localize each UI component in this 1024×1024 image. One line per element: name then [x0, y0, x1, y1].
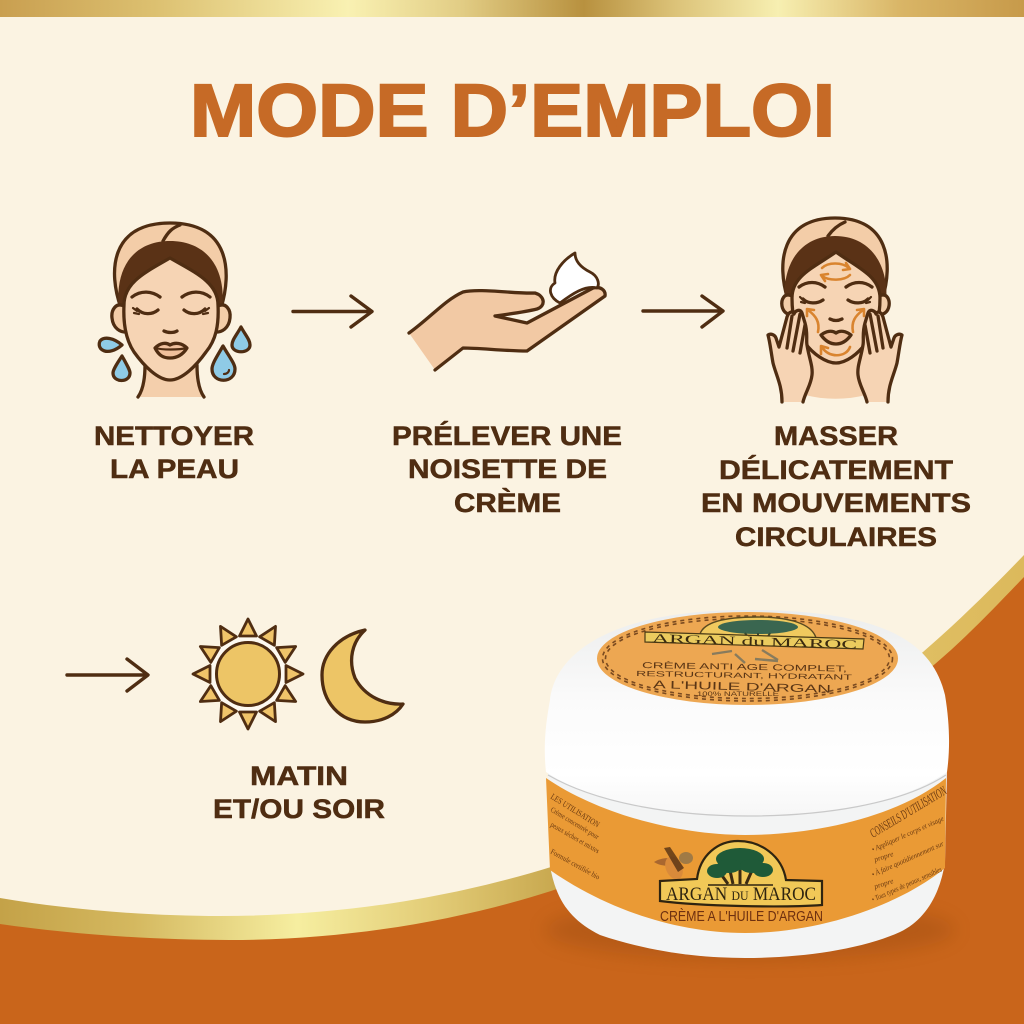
label: take cream: NOISETTE DE	[408, 454, 607, 484]
jar base	[548, 770, 947, 958]
icon: face with water drops	[99, 223, 250, 397]
argan tree	[707, 848, 773, 885]
side text right: • Tous types de peaux, sensibles	[870, 865, 943, 904]
gold curved band	[0, 555, 1024, 940]
side text right: • Appliquer le corps et visage	[870, 814, 946, 854]
lid text	[636, 660, 853, 698]
label: massage: DÉLICATEMENT	[719, 454, 954, 485]
lid text: A L'HUILE D'ARGAN	[653, 679, 831, 696]
side text left: peaux sèches et mixtes	[549, 820, 601, 855]
jar lid	[545, 610, 949, 816]
icon: sun	[193, 619, 303, 729]
jar label band	[546, 778, 950, 933]
step 3: massage gently	[701, 218, 971, 552]
label: clean skin	[94, 421, 254, 484]
product: cream jar	[545, 610, 950, 958]
jar shadow	[545, 900, 955, 960]
argan fruit	[654, 847, 693, 882]
side text right: propre	[872, 876, 895, 891]
label: clean skin: LA PEAU	[110, 454, 239, 484]
side text left: LES UTILISATION	[549, 791, 602, 829]
logo: argan du maroc	[654, 841, 823, 925]
icon: right hand	[858, 310, 902, 402]
arrow 2	[643, 296, 723, 327]
label: massage: EN MOUVEMENTS	[701, 488, 971, 518]
side text left: Crème concentrée pour	[549, 805, 601, 841]
lid text: 100% NATURELLE	[697, 691, 780, 698]
icon: hand with cream	[409, 253, 605, 370]
title: MODE D’EMPLOI	[190, 69, 835, 152]
side text right: propre	[872, 849, 895, 864]
step 2: take a dab of cream	[392, 253, 622, 518]
icon: moon	[322, 630, 403, 722]
lid seal label	[597, 612, 898, 705]
label: morning and evening	[213, 761, 385, 824]
side text left	[549, 791, 602, 882]
gold top bar	[0, 0, 1024, 17]
label: massage: MASSER	[774, 421, 898, 451]
side text right: • À faire quotidiennement sur	[870, 838, 945, 879]
side text left: Formule certifiée bio	[549, 847, 602, 882]
lid logo: ARGAN du MAROC	[652, 631, 857, 651]
orange lower area	[0, 573, 1024, 1024]
label: clean skin: NETTOYER	[94, 421, 254, 451]
label: massage	[701, 421, 971, 552]
lid logo	[645, 617, 864, 663]
step 4: morning and evening	[193, 619, 403, 824]
lid text: CRÈME ANTI AGE COMPLET,	[642, 660, 847, 674]
arrow 3	[67, 659, 148, 691]
label: morning and evening: ET/OU SOIR	[213, 794, 385, 824]
label: massage: CIRCULAIRES	[735, 522, 937, 552]
side text right: CONSEILS D'UTILISATION	[867, 783, 950, 841]
logo: argan du maroc: ARGAN DU MAROC	[666, 884, 816, 905]
arrow 1	[293, 296, 372, 327]
icon: face with hands and massage arrows	[768, 218, 902, 402]
lid text: RESTRUCTURANT, HYDRATANT	[636, 669, 853, 682]
label: take cream: PRÉLEVER UNE	[392, 420, 622, 451]
side text right	[867, 783, 950, 904]
step 1: clean the skin	[94, 223, 254, 484]
label: morning and evening: MATIN	[250, 761, 348, 791]
label: take cream: CRÈME	[454, 487, 561, 518]
logo: argan du maroc: CRÈME A L'HUILE D'ARGAN	[660, 908, 823, 925]
label: take cream	[392, 420, 622, 518]
icon: left hand	[768, 310, 812, 402]
